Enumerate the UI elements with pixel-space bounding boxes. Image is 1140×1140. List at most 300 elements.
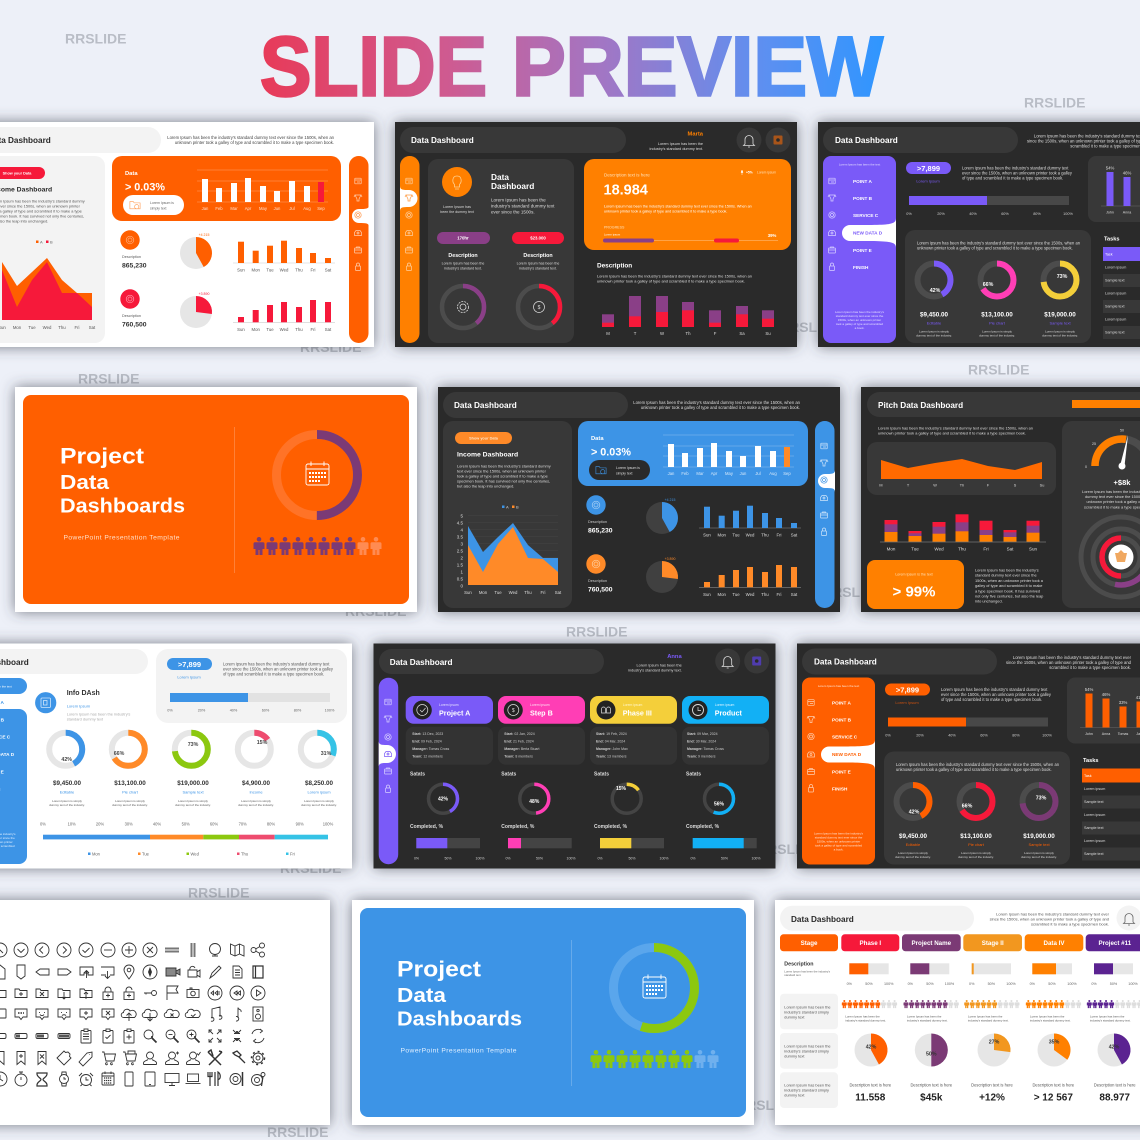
violet menu panel <box>823 156 896 343</box>
card: product: End: 30 Mar, 2024 <box>687 739 716 743</box>
donuts row: Lorem Ipsum is simply <box>241 799 271 803</box>
stat 2 <box>586 554 613 594</box>
stacked bar chart: Sa <box>739 331 745 336</box>
description cell: standard text. <box>784 973 801 977</box>
tasks table: Sample text <box>1084 852 1103 856</box>
icon grid <box>0 943 265 1086</box>
income paragraph: text ever since the 1500s, when an unknown printer <box>457 468 547 474</box>
stacked bar chart: Sun <box>1029 546 1037 552</box>
watermarks: RRSLIDE <box>188 884 249 900</box>
card: product: Lorem ipsum <box>715 703 734 707</box>
tasks table: Lorem ipsum <box>1105 292 1126 296</box>
watermarks: RRSLIDE <box>736 1097 797 1113</box>
progress row: 0% <box>1091 982 1097 986</box>
orange data card: May <box>259 206 268 211</box>
income paragraph: Lorem Ipsum has been the industry's standard dummy <box>457 464 551 468</box>
bar chart blue: Thu <box>761 532 769 538</box>
area chart panel <box>867 442 1056 495</box>
area chart: 2 <box>460 556 463 560</box>
stacked progress bar: 10% <box>68 822 76 826</box>
stacked bar chart <box>602 296 774 336</box>
stat 1 <box>586 495 613 534</box>
metrics row <box>849 1082 1136 1104</box>
description cell: Lorem Ipsum has been the industry's <box>784 970 831 974</box>
stat paragraph: of type and scrambled it to make a type specimen book. <box>962 176 1063 180</box>
progress row: 100% <box>945 982 955 986</box>
donut <box>276 434 358 516</box>
cover title <box>60 444 185 518</box>
header description <box>1006 655 1132 670</box>
callout: 99 percent: > 99% <box>893 584 935 600</box>
progress bar: 40% <box>969 212 977 216</box>
stat 1 <box>120 230 147 270</box>
area chart: Sun <box>464 590 472 595</box>
donuts row: Lorem Ipsum is simply <box>304 799 334 803</box>
income dashboard heading: Income Dashboard <box>457 452 518 458</box>
callout paragraph: 1500s, when an unknown printer took a <box>975 578 1044 583</box>
tasks table: Tasks <box>1104 236 1119 242</box>
tasks table: Sample text <box>1105 278 1124 282</box>
gauge panel <box>1062 421 1140 608</box>
blue data card: Data <box>591 436 604 442</box>
cover title <box>397 956 522 1030</box>
person bar panel: John <box>1085 732 1093 736</box>
info block: Lorem Ipsum <box>67 704 91 708</box>
gauge <box>1095 439 1140 466</box>
area chart: Sat <box>89 325 96 330</box>
blue data card: > 0.03% <box>591 446 631 458</box>
user block: industry's standard dummy text. <box>650 147 703 151</box>
donuts row: $4,900.00 <box>242 780 271 787</box>
donut panel: $19,000.00 <box>1044 312 1076 318</box>
card: step B: End: 21 Feb, 2024 <box>504 739 534 743</box>
header description: since the 1500s, when an unknown printer took a galley of type and <box>1006 660 1132 665</box>
donut panel: Lorem Ipsum has been the industry's standard dummy text ever since the 1500s, when an <box>917 240 1081 246</box>
progress row: 50% <box>1048 982 1056 986</box>
header accent bar <box>1072 400 1140 408</box>
orange progress card: Lorem Ipsum has been the industry's standard dummy text ever since the 1500s. When an <box>604 204 752 208</box>
header pill: Pitch Data Dashboard <box>878 401 963 410</box>
area chart: Thu <box>524 590 532 595</box>
area chart: Mon <box>479 590 488 595</box>
metrics row: Description text is here <box>849 1082 892 1088</box>
area chart: Wed <box>43 325 52 330</box>
area chart: Tue <box>28 325 36 330</box>
stat 1: Description <box>588 520 607 524</box>
bar chart blue: Sat <box>791 532 798 538</box>
slide 6: pitch data dashboard <box>861 387 1140 612</box>
slide 12: light stage table <box>775 900 1140 1125</box>
bar chart orange: Fri <box>310 268 316 272</box>
panel heading <box>491 172 534 191</box>
icon row 2: tags and devices <box>0 965 263 979</box>
orange menu panel <box>802 678 875 864</box>
card: phase III: Lorem ipsum <box>623 703 642 707</box>
status donuts: 48% <box>529 799 540 805</box>
description cell <box>784 962 831 977</box>
bar chart orange: Tue <box>266 268 274 272</box>
intro text: unknown printer took a galley of type and scrambled it to make a type specimen book. <box>878 430 1026 436</box>
tasks table: Tasks <box>1083 758 1098 764</box>
progress bar: 60% <box>980 734 988 738</box>
pies row <box>854 1034 1130 1066</box>
card: phase III: End: 04 Mar, 2024 <box>596 739 625 743</box>
stacked progress bar: 80% <box>267 822 275 826</box>
cover title: Project <box>60 444 145 468</box>
stacked progress bar: 20% <box>96 822 104 826</box>
title <box>260 20 884 114</box>
bar chart orange: Mon <box>718 592 726 597</box>
violet menu panel: standard dummy text ever since the <box>836 314 884 318</box>
column tabs: Data IV <box>1044 940 1065 947</box>
progress row: 0% <box>1030 982 1036 986</box>
header description: scrambled it to make a type specimen book. <box>1031 922 1109 926</box>
stacked progress bar: 100% <box>323 822 334 826</box>
panel heading: Data <box>491 172 509 182</box>
donut panel: dummy text of the industry. <box>895 855 931 859</box>
stat paragraph: of type and scrambled it to make a type specimen book. <box>941 697 1042 702</box>
violet menu panel: a book. <box>855 326 865 330</box>
slide 8: dark project cards <box>374 644 776 868</box>
progress bar <box>885 718 1052 738</box>
left panel: Description <box>448 253 478 259</box>
area chart: 3 <box>460 542 463 546</box>
donut panel: $13,100.00 <box>960 833 992 840</box>
violet menu panel: NEW DATA D <box>853 230 883 236</box>
column tabs: Stage II <box>982 940 1004 947</box>
donuts row: Lorem ipsum <box>307 790 331 794</box>
area chart: Wed <box>509 590 518 595</box>
slide 2: dark orange dashboard <box>395 122 797 347</box>
stat panel: Lorem Ipsum <box>177 674 201 680</box>
slide 10: icon set <box>0 900 330 1125</box>
donut panel: Editable <box>906 842 921 847</box>
area chart panel: W <box>933 484 937 488</box>
sidebar <box>400 156 420 343</box>
orange menu panel: Lorem Ipsum has been the text <box>818 684 859 688</box>
status donuts: Satats <box>594 772 609 778</box>
progress row: 0% <box>969 982 975 986</box>
person bar panel <box>1067 678 1140 744</box>
header description <box>990 912 1110 926</box>
pie 1: +4 215 <box>199 233 209 237</box>
stacked bar chart: W <box>660 331 665 336</box>
card: step B: Step B <box>530 708 553 718</box>
area chart: Fri <box>74 325 80 330</box>
icon: calendar <box>643 974 666 998</box>
progress bar: 60% <box>1001 212 1009 216</box>
stat 2: 760,500 <box>122 322 147 328</box>
bar chart blue: Wed <box>746 532 755 538</box>
orange progress card: PROGRESS <box>604 226 625 230</box>
column tabs: Project Name <box>912 940 952 947</box>
card: step B: $ <box>512 708 515 714</box>
progress row: 100% <box>884 982 894 986</box>
tasks table: Lorem ipsum <box>1084 839 1105 843</box>
area chart: Thu <box>58 325 66 330</box>
sidebar <box>349 156 369 343</box>
card: project A: End: 09 Feb, 2024 <box>412 739 442 743</box>
income paragraph <box>0 198 85 224</box>
donuts row: 42% <box>61 757 72 763</box>
progress bar: 80% <box>1012 734 1020 738</box>
watermarks: RRSLIDE <box>78 370 139 386</box>
bar chart orange: Thu <box>761 592 769 597</box>
tasks table: Sample text <box>1084 800 1103 804</box>
left panel: industry's standard dummy text <box>491 204 555 208</box>
donut left <box>442 286 484 328</box>
bar chart orange: Tue <box>732 592 740 597</box>
header pill: Data Dashboard <box>411 136 474 145</box>
orange data card: Jan <box>202 206 209 211</box>
stacked progress bar: 60% <box>210 822 218 826</box>
header pill <box>443 392 628 418</box>
donut panel: 66% <box>962 804 973 810</box>
pies row: 42% <box>866 1044 877 1050</box>
orange data card: Jun <box>274 206 281 211</box>
completed bars: 100% <box>752 856 760 860</box>
stat pill: Lorem Ipsum <box>895 700 919 705</box>
show your data pill <box>0 167 45 179</box>
pills: 170hr <box>457 236 469 240</box>
metrics row: 88.977 <box>1099 1092 1130 1104</box>
orange progress card: +5% <box>746 170 753 174</box>
status donuts: Satats <box>501 772 517 778</box>
bar chart red: Tue <box>266 327 274 332</box>
stat paragraph: ever since the 1500s, when an unknown printer took a galley <box>962 170 1073 176</box>
show your data pill: Show your Data <box>3 172 32 176</box>
stacked bar heading: unknown printer took a galley of type and scrambled it to make a type specimen book. <box>597 278 745 284</box>
orange progress card: 39% <box>768 233 776 238</box>
pills <box>437 232 564 244</box>
progress row: 100% <box>1006 982 1016 986</box>
orange data card: Lorem Ipsum is <box>150 201 174 205</box>
completed bars: 0% <box>597 856 603 860</box>
column tabs: Stage <box>801 940 818 947</box>
completed bars: 0% <box>505 856 511 860</box>
blue data card: Lorem Ipsum is <box>616 466 640 470</box>
intro text <box>878 426 1033 436</box>
people row <box>590 1050 718 1068</box>
stat panel: 20% <box>198 708 206 712</box>
stacked bar chart <box>880 514 1046 552</box>
donuts row: Lorem Ipsum is simply <box>52 799 82 803</box>
header pill: Data Dashboard <box>791 915 854 924</box>
intro text: Lorem Ipsum has been the industry's standard dummy text ever since the 1500s, when an <box>878 426 1033 430</box>
person bar panel: Anna <box>1123 210 1131 214</box>
blue data card: May <box>725 471 734 476</box>
donut panel: $13,100.00 <box>981 312 1013 318</box>
area chart: Sat <box>555 590 562 595</box>
completed bars: Completed, % <box>501 824 535 830</box>
completed bars: Completed, % <box>686 824 720 830</box>
bar chart orange: Sat <box>325 268 332 272</box>
bar chart red: Sun <box>237 327 245 332</box>
bar chart red: Wed <box>280 327 289 332</box>
tasks table: Sample text <box>1084 826 1103 830</box>
header description: Lorem Ipsum has been the industry's standard dummy text ever <box>996 912 1110 916</box>
progress bar: 40% <box>948 734 956 738</box>
tasks table: Sample text <box>1105 304 1124 308</box>
area chart panel: Th <box>960 484 964 488</box>
donuts row: dummy text of the industry. <box>112 803 148 807</box>
orange progress card: 18.984 <box>604 182 648 198</box>
pie 1 <box>646 498 678 534</box>
stat pill: >7,899 <box>896 685 919 694</box>
stat pill: Lorem Ipsum <box>916 178 940 184</box>
legend: B <box>516 504 519 510</box>
completed bars: Completed, % <box>594 824 628 830</box>
blue data card <box>578 421 808 486</box>
cover title: Data <box>397 985 447 1007</box>
donuts row: 66% <box>114 751 125 757</box>
people rows: industry's standard dummy text. <box>968 1018 1009 1022</box>
person bar panel <box>1088 156 1140 222</box>
stat 2: Description <box>122 314 141 318</box>
donut panel: Lorem Ipsum is simply <box>919 330 949 334</box>
callout paragraph: a type specimen book. It has survived <box>975 588 1040 593</box>
donut panel: Lorem Ipsum has been the industry's standard dummy text ever since the 1500s, when an <box>896 762 1060 767</box>
donuts row: 31% <box>321 751 332 757</box>
stacked progress bar: 90% <box>296 822 304 826</box>
stacked bar chart: Sat <box>1007 546 1014 552</box>
header description <box>167 135 335 145</box>
completed bars: 100% <box>567 856 575 860</box>
blue data card: Aug <box>769 471 777 476</box>
info block <box>35 690 130 722</box>
user block: industry's standard dummy text. <box>628 668 682 672</box>
orange data card: Mar <box>230 206 238 211</box>
legend: Fri <box>290 852 295 856</box>
stacked progress bar <box>40 822 334 839</box>
stat panel: ever since the 1500s, when an unknown printer took a galley <box>223 666 334 672</box>
pie 2: +3 890 <box>199 292 209 296</box>
stacked progress bar: 70% <box>239 822 247 826</box>
callout: 99 percent <box>867 560 964 609</box>
violet menu panel: FINISH <box>853 265 869 270</box>
donut panel: unknown printer took a galley of type and scrambled it to make a type specimen book. <box>896 767 1052 772</box>
legend: A <box>40 240 43 244</box>
orange data card: simply text <box>150 206 167 210</box>
icon row 7: time and devices <box>0 1072 265 1086</box>
callout paragraph: standard dummy text ever since the <box>975 573 1037 578</box>
bar chart blue: Mon <box>718 532 726 538</box>
orange data card: Data <box>125 171 138 177</box>
slide 7: light project info dashboard <box>0 644 352 868</box>
progress bar: 20% <box>937 212 945 216</box>
bar chart red <box>233 300 335 332</box>
person bar panel: 33% <box>1119 700 1127 705</box>
people rows: Lorem Ipsum has been the <box>968 1014 1003 1018</box>
legend: A <box>506 504 509 510</box>
progress bar: 100% <box>1063 212 1073 216</box>
income paragraph: but also the leap into unchanged. <box>457 484 514 488</box>
callout: 99 percent: Lorem Ipsum is the text <box>895 572 933 576</box>
bar chart red: Mon <box>252 327 260 332</box>
stat 1: 865,230 <box>588 528 613 534</box>
donut panel: Lorem Ipsum is simply <box>1045 330 1075 334</box>
progress bar: 20% <box>916 734 924 738</box>
watermarks: RRSLIDE <box>822 584 883 600</box>
donut panel: 73% <box>1057 274 1068 280</box>
orange menu panel: took a galley of type and scrambled <box>815 844 862 848</box>
stacked bar heading: Lorem Ipsum has been the industry's standard dummy text ever since the 1500s, when an <box>597 274 752 278</box>
progress row: 100% <box>1128 982 1138 986</box>
donuts row: Pie chart <box>122 790 139 794</box>
orange menu panel: POINT B <box>832 718 852 722</box>
cover title: Dashboards <box>60 496 185 518</box>
left panel: Lorem Ipsum has <box>443 205 471 209</box>
tasks table <box>1103 236 1140 339</box>
orange menu panel: SERVICE C <box>832 734 858 740</box>
bar chart orange: Fri <box>776 592 782 597</box>
donuts row: Sample text <box>182 790 204 794</box>
column tabs <box>780 934 1140 951</box>
card: product: Product <box>715 708 742 718</box>
donuts row: $8,250.00 <box>305 780 334 787</box>
header description: unknown printer took a galley of type and scrambled it to make a type specimen book. <box>175 140 334 145</box>
area chart: 4.5 <box>457 520 463 526</box>
metrics row: Description text is here <box>1094 1082 1136 1088</box>
icon row 3: folders and media <box>0 986 265 1000</box>
donut panel: dummy text of the industry. <box>1042 334 1078 338</box>
stat 2: Description <box>588 579 607 583</box>
orange data card: Apr <box>245 206 252 211</box>
slide 1: light income dashboard <box>0 122 374 347</box>
bar chart orange: Sat <box>791 592 798 597</box>
donut panel: 42% <box>909 810 920 816</box>
donut panel: Lorem Ipsum is simply <box>982 330 1012 334</box>
card: project A: Team: 12 members <box>412 754 443 758</box>
progress row: 100% <box>1067 982 1077 986</box>
row labels: industry's standard simply <box>784 1048 829 1054</box>
stat paragraph <box>941 687 1052 702</box>
area chart panel: M <box>879 484 883 488</box>
icon row 5: battery, clipboard, zoom <box>0 1029 264 1043</box>
show your data pill <box>455 432 512 444</box>
violet menu panel: took a galley of type and scrambled <box>836 322 883 326</box>
callout paragraph: galley of type and scrambled it to make <box>975 583 1042 588</box>
stacked progress bar: 50% <box>182 822 190 826</box>
concentric rings <box>1081 517 1140 597</box>
cover title: Project <box>397 956 482 982</box>
completed bars: 0% <box>414 856 419 860</box>
icon: calendar <box>306 462 329 485</box>
sidebar <box>815 421 835 608</box>
area chart: 2.5 <box>457 548 463 554</box>
donuts row: Income <box>249 790 263 794</box>
people rows: industry's standard dummy text. <box>907 1018 948 1022</box>
header description: Lorem Ipsum has been the industry's standard dummy text ever <box>1013 655 1132 660</box>
area chart: Mon <box>13 325 22 330</box>
progress row: 50% <box>988 982 996 986</box>
area chart: 5 <box>460 514 463 518</box>
donut panel: dummy text of the industry. <box>1021 855 1057 859</box>
left panel: Lorem Ipsum has been the <box>491 198 546 202</box>
header pill <box>823 127 1018 153</box>
pies row: 27% <box>989 1040 1000 1046</box>
legend: Tue <box>142 852 150 856</box>
card: step B: Manager: Berta Stuart <box>504 747 540 751</box>
row labels: Lorem Ipsum has been the <box>784 1044 831 1048</box>
donuts row: $13,100.00 <box>114 780 146 787</box>
area chart: 1.5 <box>457 562 463 568</box>
orange progress card: Lorem ipsum <box>604 232 621 236</box>
tasks table: Lorem ipsum <box>1084 787 1105 791</box>
bar chart orange: Wed <box>280 268 289 272</box>
column tabs: Project #11 <box>1098 940 1132 947</box>
legend <box>88 852 295 856</box>
